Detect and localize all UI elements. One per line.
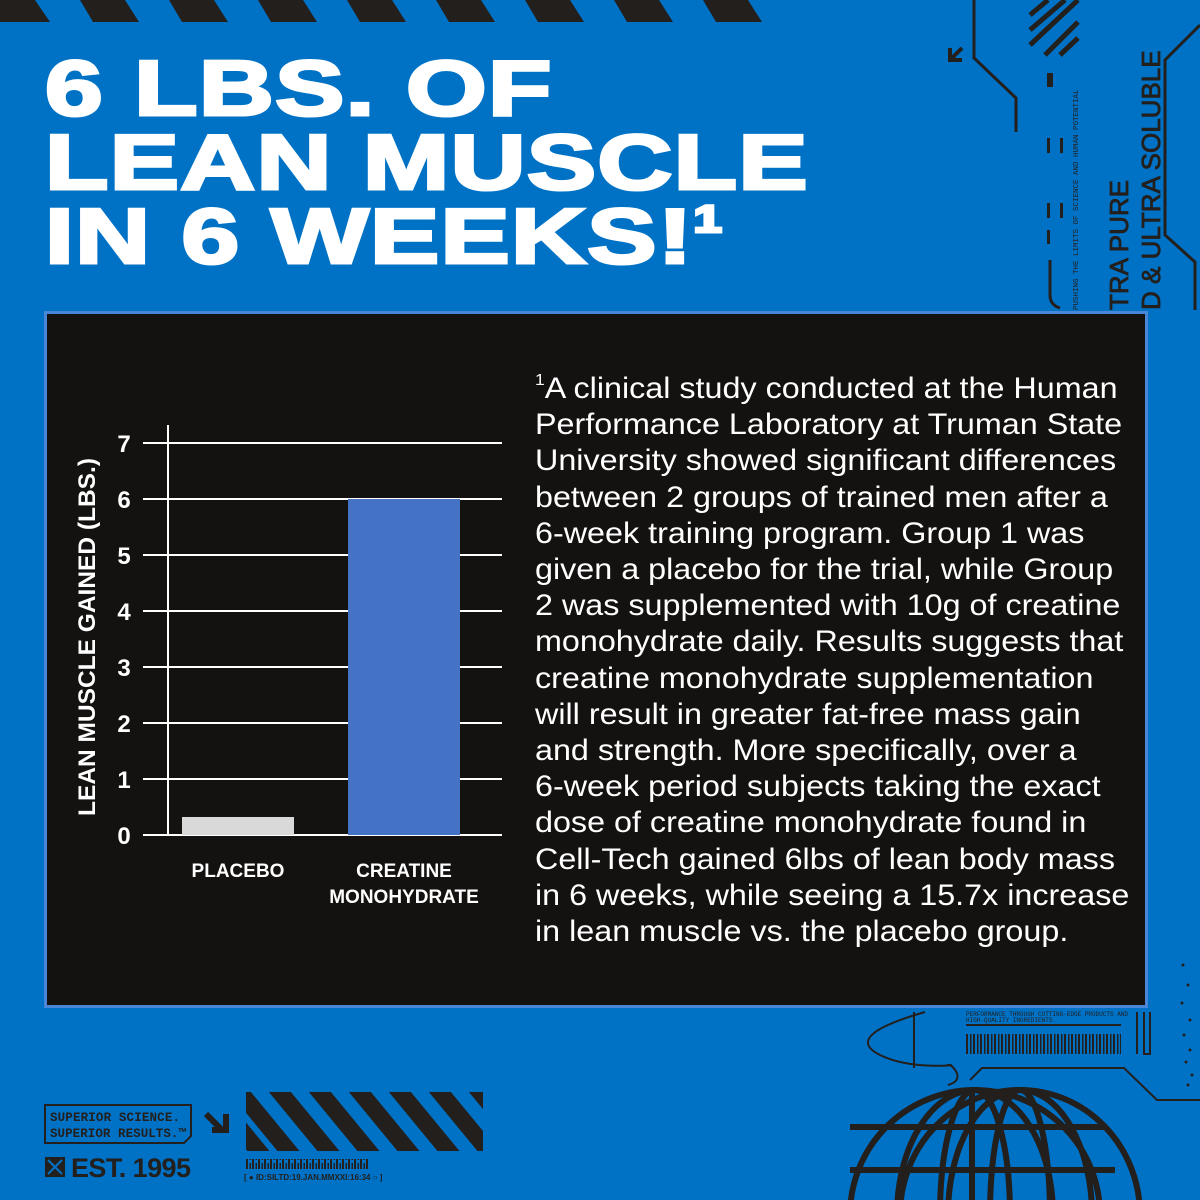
bar chart: CREATINE (356, 861, 452, 882)
title: LEAN MUSCLE (45, 118, 809, 206)
text block: study description: monohydrate daily. Results suggests that (535, 625, 1123, 658)
decorations background: PUSHING THE LIMITS OF SCIENCE AND HUMAN POTENTIAL (1073, 89, 1081, 310)
decorations background: TRA PURE (1104, 180, 1134, 310)
bottom-right: wave, barcode (868, 1012, 1200, 1100)
panel: study (44, 311, 1148, 1008)
text block: study description: 6-week period subjects taking the exact (535, 770, 1101, 803)
superior box (45, 1105, 191, 1143)
text block: study description: 2 was supplemented with 10g of creatine (535, 589, 1120, 622)
text block: study description: 1A clinical study conducted at the Human (535, 372, 1118, 405)
text block: study description: 6-week training program. Group 1 was (535, 517, 1084, 550)
arrow (206, 1114, 226, 1131)
top stripes (0, 0, 762, 22)
bar chart: PLACEBO (192, 861, 284, 882)
decorations background: SUPERIOR RESULTS.™ (50, 1127, 186, 1141)
decorations background: SUPERIOR SCIENCE. (50, 1111, 180, 1125)
bar chart: 0 (117, 823, 131, 850)
y-axis label: LEAN MUSCLE GAINED (LBS.) (74, 458, 101, 816)
decorations background: PERFORMANCE THROUGH CUTTING-EDGE PRODUCTS AND (966, 1011, 1128, 1018)
bar chart: 3 (117, 655, 131, 682)
decorations background: [ ● ID:SILTD:19.JAN.MMXXI:16:34 ○ ] (244, 1173, 383, 1182)
bar chart: MONOHYDRATE (329, 887, 479, 908)
decorations background: EST. 1995 (71, 1153, 191, 1183)
title (45, 44, 809, 280)
decorations background: HIGH-QUALITY INGREDIENTS. (966, 1017, 1056, 1024)
text block: study description: in 6 weeks, while seeing a 15.7x increase (535, 879, 1129, 912)
bar chart: 1 (117, 767, 131, 794)
text block: study description: in lean muscle vs. the placebo group. (535, 915, 1068, 948)
title: IN 6 WEEKS!1 (45, 192, 723, 280)
bar chart: 6 (117, 487, 131, 514)
bar chart (74, 425, 502, 908)
right decorations (950, 0, 1200, 310)
dotted column (1180, 964, 1194, 1086)
bar chart: 4 (117, 599, 131, 626)
decorations background: D & ULTRA SOLUBLE (1136, 50, 1166, 310)
bar chart: 2 (117, 711, 131, 738)
bar chart: 5 (117, 543, 131, 570)
text block: study description: given a placebo for the trial, while Group (535, 553, 1113, 586)
globes (850, 1090, 1140, 1200)
text block: study description: dose of creatine monohydrate found in (535, 806, 1086, 839)
text block: study description: between 2 groups of trained men after a (535, 481, 1108, 514)
text block: study description: will result in greater fat-free mass gain (535, 698, 1081, 731)
text block: study description: University showed significant differences (535, 444, 1116, 477)
title: 6 LBS. OF (45, 44, 553, 132)
text block: study description (535, 372, 1129, 948)
bottom-left stripes (246, 1092, 483, 1151)
text block: study description: and strength. More specifically, over a (535, 734, 1077, 767)
text block: study description: Performance Laboratory at Truman State (535, 408, 1122, 441)
text block: study description: creatine monohydrate supplementation (535, 662, 1093, 695)
bar chart: 7 (117, 431, 131, 458)
text block: study description: Cell-Tech gained 6lbs of lean body mass (535, 843, 1115, 876)
bars (182, 817, 294, 835)
